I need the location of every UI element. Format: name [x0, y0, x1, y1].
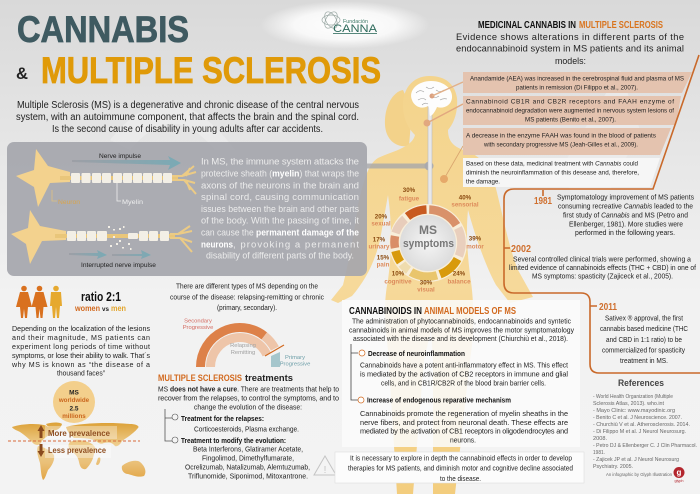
connector lines from body to evidence — [424, 82, 463, 183]
worldwide circle: MS — [69, 390, 80, 396]
evidence text — [456, 32, 684, 66]
warning icon — [314, 456, 336, 476]
intro text: Is the second cause of disability in young adults after car accidents. — [52, 124, 323, 135]
title: & — [16, 64, 28, 83]
symptom labels: 30% — [403, 187, 416, 194]
symptom labels: pain — [377, 262, 390, 268]
ratio: vs — [102, 307, 110, 313]
symptom labels: cognitive — [384, 278, 412, 286]
glyph logo: g — [677, 468, 682, 477]
intro paragraph: The administration of phytocannabinoids, endocannabinoids and syntetic — [352, 316, 571, 326]
lesions text: experiment long periods of time without — [12, 343, 150, 351]
subheading: reparative mechanism: Increase of endogenous reparative mechanism — [367, 396, 511, 404]
references: - Zajicek JP et al. J Neurol Neurosurg — [593, 457, 679, 463]
treatment list: Triflunomide, Siponimod, Mitoxantrone. — [188, 474, 308, 480]
treatment list: Treatment for the relapses: — [181, 414, 264, 423]
evidence box 4: the damage. — [466, 178, 500, 186]
label: myelin — [117, 183, 143, 206]
symptom labels: 10% — [392, 270, 405, 278]
evidence box 4 — [463, 158, 660, 187]
bracket — [351, 344, 365, 403]
semicircle chart: MS types: Remitting — [231, 350, 255, 356]
worldwide circle: worldwide — [58, 397, 90, 404]
timeline 2011 — [599, 302, 688, 365]
symptom labels: 15% — [377, 254, 390, 262]
timeline 2002: MS symptoms: spasticity (Zajiceck et al., 2005). — [532, 274, 673, 280]
treatment list: Beta Interferons, Glatiramer Acetate, — [193, 446, 303, 454]
panel text: immune attack: protective sheath (myelin) that wraps the — [201, 168, 359, 180]
arrows: interrupted impulse: Interrupted nerve impulse — [81, 262, 156, 269]
text: neuroinflammation: is mediated by the activation of CB2 receptors in immune and glial — [360, 370, 568, 378]
lesions text: and their magnitude, MS patients can — [12, 334, 150, 342]
title: CANNABIS — [17, 9, 189, 50]
references: Sclerosis Atlas, 2013). who.int — [593, 401, 664, 407]
prevalence labels: Less prevalence — [48, 446, 107, 455]
panel text: immune attack: can cause the permanent damage of the — [201, 228, 359, 238]
symptom labels: 17% — [373, 236, 386, 244]
callout: further research: therapies for MS patients, and diminish motor and cognitive decline associated — [348, 464, 573, 472]
timeline 2011: commercialized for spasticity — [602, 348, 685, 354]
timeline 1981: performed in the following years. — [575, 230, 675, 237]
donut: MS symptoms: symptoms — [403, 238, 454, 250]
worldwide circle — [53, 381, 95, 423]
intro text: Multiple Sclerosis (MS) is a degenerative and chronic disease of the central nervous — [17, 100, 359, 111]
ratio: women — [74, 304, 100, 313]
prevalence labels: More prevalence — [48, 429, 111, 438]
connector to spine — [367, 162, 434, 170]
references: Psychiatry. 2005. — [593, 464, 633, 470]
text: neuroinflammation: cells, and in CB1R/CB2R of the blood brain barrier cells. — [381, 378, 546, 388]
symptom labels: 40% — [459, 194, 472, 202]
text: reparative: Cannabinoids promote the regeneration of myelin sheaths in the — [360, 409, 568, 418]
timeline 1981: first study of Cannabis and MS (Petro and — [563, 212, 688, 220]
evidence box 1 — [463, 72, 692, 93]
intro text: system, with an autoimmune component, that affects the brain and the spinal cord. — [16, 112, 359, 123]
panel text: immune attack: In MS, the immune system attacks the — [201, 156, 359, 168]
treatment list: Corticoesteroids, Plasma exchange. — [194, 426, 299, 434]
symptom labels: motor — [466, 244, 484, 250]
semicircle chart: MS types: Progressive — [280, 362, 310, 368]
panel text: immune attack: axons of the neurons in the brain and — [201, 180, 359, 192]
panel: cannabinoids in animal models — [342, 300, 580, 447]
timeline 2011: 2011 — [599, 302, 617, 313]
timeline 1981: consuming recreative Cannabis leaded to the — [558, 204, 693, 210]
symptom labels: 30% — [420, 280, 433, 286]
timeline 2002: 2002 — [511, 244, 531, 255]
timeline 2002: Several controlled clinical trials were performed, showing a — [513, 256, 691, 264]
neuron: healthy — [16, 149, 196, 207]
heading: animal models: CANNABINOIDS IN — [349, 306, 422, 317]
panel text: immune attack — [201, 156, 359, 262]
symptom labels: sensorial — [451, 202, 479, 208]
timeline 2011: Sativex ® approval, the first — [605, 314, 683, 322]
symptom labels: 20% — [375, 214, 388, 220]
semicircle chart: MS types: Progressive — [183, 325, 213, 331]
evidence box 1: patients in remission (Di Filippo et al., 2007). — [516, 84, 638, 92]
neuron: damaged — [11, 210, 192, 264]
symptom labels: urinary — [369, 244, 390, 250]
timeline 1981: Symptomatology improvement of MS patients — [557, 194, 694, 202]
timeline 2011: cannabis based medicine (THC — [600, 326, 688, 333]
worldwide circle: 2.5 — [69, 406, 79, 412]
symptom labels — [369, 187, 484, 294]
panel text: immune attack: spinal cord, causing communication — [201, 192, 359, 203]
treatments text: MS does not have a cure. There are treatments that help to — [158, 384, 339, 394]
references: An infographic by Glyph Illustration — [606, 472, 672, 478]
evidence box 3: A decrease in the enzyme FAAH was found in the blood of patients — [466, 132, 657, 140]
title — [16, 9, 381, 91]
references: References — [618, 378, 664, 388]
donut: MS symptoms — [389, 204, 467, 282]
label: neuron — [52, 190, 80, 206]
intro paragraph: cannabinoids in animal models of MS improves the motor symptomatology — [349, 326, 574, 334]
evidence box 1: Anandamide (AEA) was increased in the cerebrospinal fluid and plasma of MS — [470, 76, 685, 82]
timeline 2002 — [509, 244, 696, 280]
arrow: nerve impulse — [72, 153, 181, 170]
semicircle chart: MS types: Secondary — [184, 318, 212, 324]
semicircle chart: MS types: Primary — [285, 355, 305, 361]
symptom labels: 39% — [469, 236, 482, 242]
callout: further research — [335, 452, 584, 483]
symptom labels: balance — [447, 278, 471, 286]
text: reparative: neurons. — [450, 436, 476, 444]
brain and spine — [411, 81, 452, 205]
evidence box 2: endocannabinoid degradation were augmented in nervous system lesions of — [466, 108, 674, 114]
evidence text: models: — [555, 56, 586, 66]
callout: further research: It is necessary to explore in depth the cannabinoid effects in order to develop — [350, 454, 572, 462]
label: myelin: Myelin — [122, 199, 143, 206]
references: - Mayo Clinic: www.mayodinic.org — [593, 408, 675, 414]
ratio — [74, 289, 126, 313]
intro paragraph — [349, 316, 574, 343]
references: 2008. — [593, 436, 607, 442]
ratio: ratio 2:1 — [81, 289, 121, 304]
glyph logo — [674, 467, 684, 483]
panel text: immune attack: disability of different parts of the body. — [206, 250, 354, 262]
evidence box 4: Based on these data, medicinal treatment with Cannabis could — [466, 160, 638, 168]
heading: medicinal cannabis: MEDICINAL CANNABIS IN — [478, 20, 576, 31]
treatments text: change the evolution of the disease: — [194, 402, 302, 412]
timeline 1981: Ellenberger, 1981). More studies were — [569, 222, 683, 228]
references: - Benito C et al. J Neuroscience. 2007. — [593, 415, 682, 421]
evidence box 2: MS patients (Benito et al., 2007). — [525, 116, 616, 124]
worldwide circle: millions — [62, 413, 86, 420]
evidence box 2: Cannabinoid CB1R and CB2R receptors and FAAH enzyme of — [466, 98, 674, 106]
heading: animal models: ANIMAL MODELS OF MS — [424, 306, 516, 317]
world map — [12, 422, 145, 480]
types text — [170, 284, 324, 312]
donut: MS symptoms: MS — [419, 223, 437, 237]
timeline 2002: limited evidence of cannabinoids effects (THC + CBD) in one of — [509, 265, 696, 272]
symptom labels: visual — [417, 286, 435, 294]
ratio: men — [111, 304, 126, 313]
evidence text: endocannabinoid system in MS patients and its animal — [456, 44, 684, 54]
text: neuroinflammation: Cannabinoids have a potent anti-inflammatory effect in MS. This effect — [360, 360, 568, 370]
types text: course of the disease: relapsing-remitting or chronic — [170, 294, 324, 302]
evidence box 2 — [463, 96, 681, 125]
types text: (primary, secondary). — [217, 305, 277, 312]
treatment list: Ocrelizumab, Natalizumab, Alemtuzumab, — [185, 464, 310, 472]
treatment list: Fingolimod, Dimethylfumarate, — [202, 456, 294, 462]
evidence box 3: with secondary progressive MS (Jeah-Gilles et al., 2009). — [483, 142, 638, 148]
panel text: immune attack: issues between the brain and other parts — [201, 204, 359, 215]
references: 1981. — [593, 450, 605, 456]
symptom labels: sexual — [371, 220, 391, 228]
lesions text: symptoms, or lose their ability to walk. That´s — [12, 352, 150, 360]
timeline line — [504, 55, 700, 373]
evidence text: Evidence shows alterations in different parts of the — [456, 32, 684, 42]
panel text: immune attack: of the body. With the passing of time, it — [201, 216, 359, 226]
symptom labels: 24% — [453, 270, 466, 278]
logo: Fundacion Canna: CANNA — [333, 23, 378, 35]
semicircle chart: MS types — [183, 318, 310, 368]
references: - World Health Organization (Multiple — [593, 394, 673, 400]
text: reparative — [360, 409, 568, 444]
timeline 1981: 1981 — [534, 196, 552, 207]
heading: animal models — [349, 306, 516, 317]
arrows: interrupted impulse — [69, 250, 156, 269]
callout: further research: to the disease. — [440, 474, 481, 483]
logo: Fundacion Canna — [322, 10, 378, 35]
treatment list: Treatment to modify the evolution: — [181, 436, 286, 445]
label: neuron: Neuron — [58, 199, 80, 206]
treatments text: recover from the relapses, to control the symptoms, and to — [158, 394, 339, 402]
subheading: neuroinflammation: Decrease of neuroinflammation — [368, 349, 465, 358]
intro text — [16, 100, 359, 135]
people icons — [16, 286, 62, 318]
body silhouette — [331, 76, 533, 494]
text: neuroinflammation — [360, 360, 568, 388]
panel text: immune attack: , provoking a permanent — [233, 240, 359, 250]
panel: nerve impulse and immune attack — [7, 142, 434, 276]
lesions text: why MS is known as “the disease of a — [11, 361, 150, 369]
arrow: nerve impulse: Nerve impulse — [99, 153, 141, 160]
lesions text — [11, 325, 150, 378]
references: - Di Filippo M et al. J Neurol Neurosurg. — [593, 429, 686, 435]
references — [593, 378, 697, 478]
evidence box 4: diminish the neuroinflammation of this desease and, therefore, — [466, 170, 639, 176]
heading: treatments: MULTIPLE SCLEROSIS — [158, 373, 242, 384]
lesions text: Depending on the localization of the lesions — [12, 325, 150, 333]
heading: medicinal cannabis: MULTIPLE SCLEROSIS — [579, 20, 663, 31]
text: reparative: mediated by the activation of CB1 receptors in oligodendrocytes and — [360, 426, 568, 436]
timeline 2011: and CBD in 1:1 ratio) to be — [606, 337, 682, 344]
text: reparative: nerve fibers, and protect from neuronal death. These effects are — [360, 418, 568, 427]
glyph logo: glyph — [674, 479, 684, 483]
logo: Fundacion Canna: Fundación — [343, 19, 368, 25]
treatment list — [165, 409, 310, 480]
heading: treatments: treatments — [245, 373, 293, 384]
intro paragraph: associated with the disease and its development (Chiurchiù et al., 2018). — [353, 334, 568, 343]
treatments text — [158, 384, 339, 412]
evidence box 3 — [463, 128, 671, 155]
panel text: immune attack: neurons — [201, 240, 233, 250]
semicircle chart: MS types: Relapsing — [230, 343, 256, 349]
references: - Churchiù V et al. Atherosclerosis. 2014. — [593, 422, 690, 428]
warning icon: ! — [324, 465, 326, 476]
title: MULTIPLE SCLEROSIS — [41, 50, 381, 91]
symptom labels: fatigue — [399, 196, 420, 202]
lesions text: thousand faces” — [57, 370, 106, 378]
timeline 1981 — [534, 194, 694, 237]
types text: There are different types of MS depending on the — [176, 284, 318, 290]
timeline 2011: treatment in MS. — [620, 358, 668, 365]
heading: medicinal cannabis — [478, 20, 663, 31]
prevalence labels — [8, 425, 140, 458]
